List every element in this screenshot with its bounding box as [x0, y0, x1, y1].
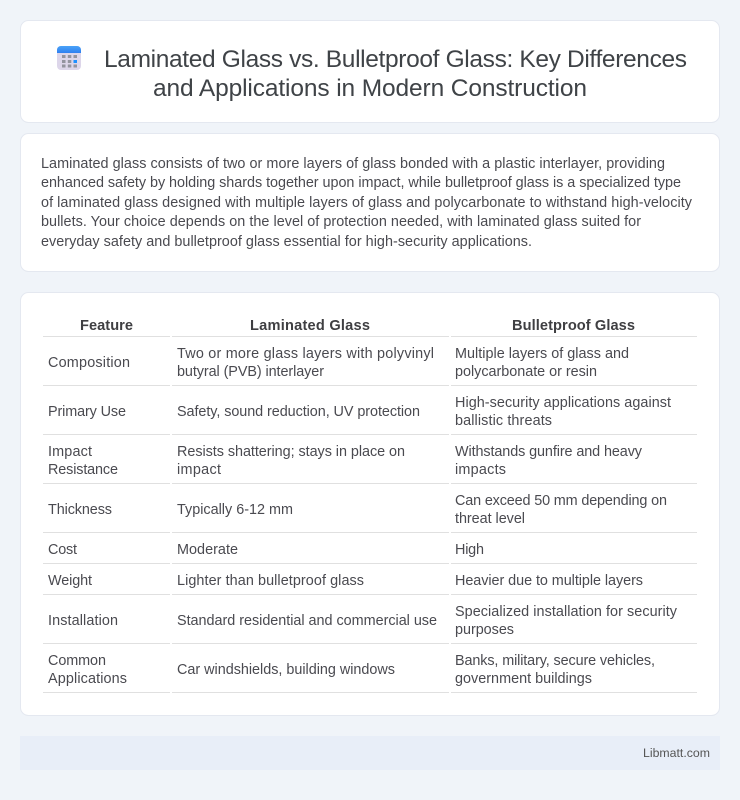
row: primary use: Safety, sound reduction, UV protection [177, 404, 420, 420]
title [104, 46, 687, 102]
row: impact resistance: Resists shattering; stays in place on [177, 444, 405, 460]
row: composition: butyral (PVB) interlayer [177, 364, 324, 380]
row: installation [48, 604, 678, 638]
row: impact resistance: Resistance [48, 462, 118, 478]
title: Laminated Glass vs. Bulletproof Glass: Key Differences [104, 46, 687, 73]
row: impact resistance: Impact [48, 444, 92, 460]
row: weight: Heavier due to multiple layers [455, 573, 643, 589]
row: thickness: Typically 6-12 mm [177, 502, 293, 518]
row: thickness [48, 493, 667, 527]
row: installation: Installation [48, 613, 118, 629]
row: composition: Composition [48, 355, 130, 371]
row: impact resistance: Withstands gunfire and heavy [455, 444, 643, 460]
row: common applications: Applications [48, 671, 127, 687]
row: common applications [48, 653, 655, 687]
row: common applications: Common [48, 653, 106, 669]
table header: Feature [80, 318, 133, 334]
title: and Applications in Modern Construction [153, 75, 587, 102]
panel: intro paragraph [20, 134, 720, 272]
row: thickness: Thickness [48, 502, 112, 518]
row: cost [48, 542, 484, 558]
row: thickness: threat level [455, 511, 525, 527]
row: common applications: Banks, military, secure vehicles, [455, 653, 655, 669]
row: common applications: Car windshields, building windows [177, 662, 395, 678]
row: primary use: Primary Use [48, 404, 126, 420]
row: composition: Multiple layers of glass and [455, 346, 629, 362]
row: impact resistance: impact [177, 462, 221, 478]
panel: intro paragraph: bullets. Your choice depends on the level of protection needed, with laminated glass suited for [41, 214, 641, 230]
row: primary use [48, 395, 671, 429]
panel: intro paragraph: everyday safety and bulletproof glass essential for high-security applications. [41, 234, 532, 250]
panel: intro paragraph: of laminated glass designed with multiple layers of glass and polycarbonate to withstand high-velocity [41, 195, 693, 211]
footer [20, 736, 720, 770]
icon: calendar [57, 46, 81, 70]
row: weight: Weight [48, 573, 92, 589]
row: cost: Moderate [177, 542, 238, 558]
row: installation: Specialized installation for security [455, 604, 678, 620]
row: composition [48, 346, 629, 380]
row: impact resistance: impacts [455, 462, 506, 478]
table header: Laminated Glass [250, 318, 370, 334]
row: installation: Standard residential and commercial use [177, 613, 437, 629]
table header: Bulletproof Glass [512, 318, 635, 334]
row: primary use: ballistic threats [455, 413, 552, 429]
table header [80, 318, 635, 334]
panel: comparison table [20, 292, 720, 716]
row: thickness: Can exceed 50 mm depending on [455, 493, 667, 509]
row: cost: Cost [48, 542, 77, 558]
footer: Libmatt.com [643, 746, 710, 760]
panel: intro paragraph: Laminated glass consists of two or more layers of glass bonded with a plastic interlayer, providing [41, 156, 665, 172]
row: cost: High [455, 542, 484, 558]
row: primary use: High-security applications against [455, 395, 671, 411]
row: weight: Lighter than bulletproof glass [177, 573, 364, 589]
title panel [20, 20, 720, 122]
panel: intro paragraph: enhanced safety by holding shards together upon impact, while bulletproof glass is a specialized type [41, 175, 681, 191]
row: impact resistance [48, 444, 643, 478]
row: installation: purposes [455, 622, 514, 638]
row: weight [48, 573, 643, 589]
row: composition: polycarbonate or resin [455, 364, 597, 380]
row: composition: Two or more glass layers with polyvinyl [177, 346, 434, 362]
row: common applications: government buildings [455, 671, 592, 687]
